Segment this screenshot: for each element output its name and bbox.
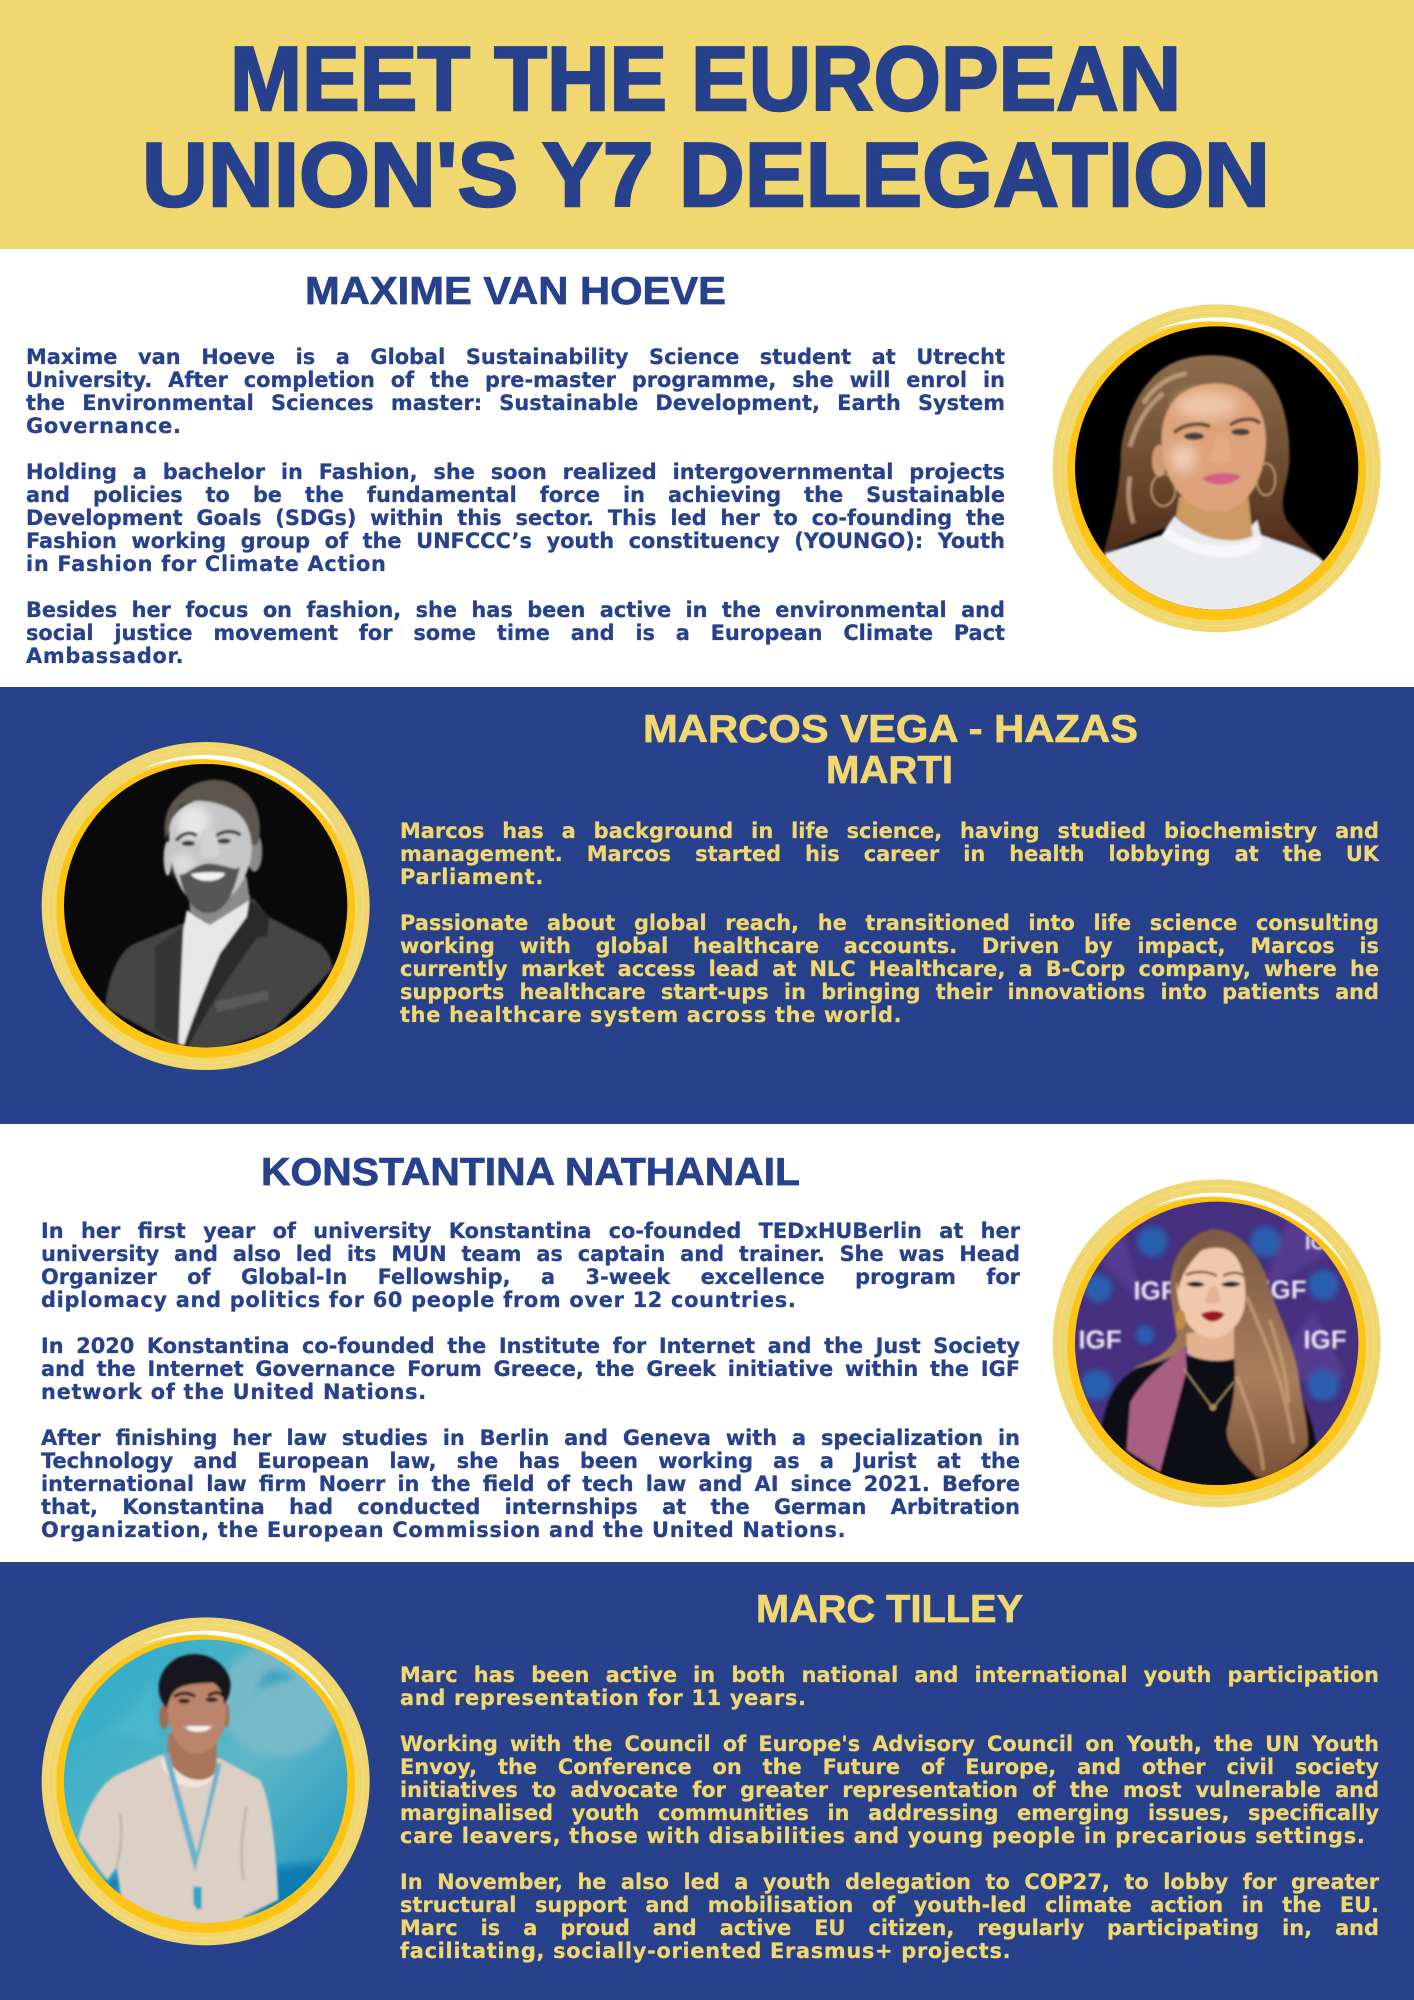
biography: Konstantina Nathanail: network of the United Nations. [41, 1380, 427, 1404]
biography: Marcos Vega-Hazas Marti: working with global healthcare accounts. Driven by impact, Marcos is [400, 934, 1379, 958]
biography: Konstantina Nathanail: After finishing her law studies in Berlin and Geneva with a specialization in [41, 1426, 1020, 1450]
title [142, 29, 1270, 226]
heading: Konstantina Nathanail: KONSTANTINA NATHANAIL [261, 1151, 800, 1194]
biography: Konstantina Nathanail: diplomacy and politics for 60 people from over 12 countries. [41, 1288, 796, 1312]
biography: Konstantina Nathanail: Organization, the European Commission and the United Nations. [41, 1518, 846, 1542]
biography: Marc Tilley: Marc is a proud and active EU citizen, regularly participating in, and [400, 1916, 1379, 1940]
biography: Konstantina Nathanail: Organizer of Global-In Fellowship, a 3-week excellence program for [41, 1265, 1020, 1289]
heading: Maxime van Hoeve: MAXIME VAN HOEVE [305, 270, 726, 313]
biography: Maxime van Hoeve: Holding a bachelor in Fashion, she soon realized intergovernmental projects [26, 460, 1005, 484]
biography: Marcos Vega-Hazas Marti: management. Marcos started his career in health lobbying at the UK [400, 842, 1379, 866]
heading: Marcos Vega-Hazas Marti: MARCOS VEGA - HAZAS [643, 708, 1138, 751]
biography: Konstantina Nathanail [40, 1219, 1020, 1542]
biography: Marcos Vega-Hazas Marti: the healthcare system across the world. [400, 1003, 902, 1027]
panel: Maxime van Hoeve [0, 249, 1414, 687]
portrait: Konstantina Nathanail: IGF [1078, 1324, 1122, 1354]
panel: Konstantina Nathanail [0, 1124, 1414, 1562]
title: MEET THE EUROPEAN [230, 29, 1181, 130]
biography: Konstantina Nathanail: and the Internet Governance Forum Greece, the Greek initiative within the IGF [41, 1357, 1020, 1381]
portrait: Maxime van Hoeve [1052, 304, 1381, 632]
biography: Marc Tilley: and representation for 11 years. [400, 1686, 807, 1710]
biography: Marc Tilley: marginalised youth communities in addressing emerging issues, specifically [400, 1801, 1379, 1825]
heading: Marcos Vega-Hazas Marti [643, 708, 1138, 792]
heading: Marcos Vega-Hazas Marti: MARTI [826, 749, 953, 792]
biography: Maxime van Hoeve: Besides her focus on fashion, she has been active in the environmental and [26, 598, 1005, 622]
portrait: Konstantina Nathanail: IGF [1305, 1232, 1338, 1254]
panel: title banner [0, 0, 1414, 249]
biography: Marcos Vega-Hazas Marti: Passionate about global reach, he transitioned into life science consulting [400, 911, 1379, 935]
biography: Maxime van Hoeve: the Environmental Sciences master: Sustainable Development, Earth System [26, 391, 1005, 415]
biography: Marcos Vega-Hazas Marti: currently market access lead at NLC Healthcare, a B-Corp company, where he [400, 957, 1379, 981]
biography: Maxime van Hoeve [26, 345, 1005, 668]
portrait: Konstantina Nathanail: IGF [1133, 1275, 1177, 1305]
biography: Marcos Vega-Hazas Marti [400, 819, 1380, 1027]
biography: Marc Tilley: initiatives to advocate for greater representation of the most vulnerable and [400, 1778, 1379, 1802]
biography: Maxime van Hoeve: University. After completion of the pre-master programme, she will enrol in [26, 368, 1005, 392]
biography: Konstantina Nathanail: In 2020 Konstantina co-founded the Institute for Internet and the Just Society [41, 1334, 1020, 1358]
biography: Maxime van Hoeve: Fashion working group of the UNFCCC’s youth constituency (YOUNGO): Youth [26, 529, 1005, 553]
biography: Marc Tilley: care leavers, those with disabilities and young people in precarious settings. [400, 1824, 1365, 1848]
portrait: Konstantina Nathanail: IGF [1303, 1324, 1347, 1354]
biography: Konstantina Nathanail: that, Konstantina had conducted internships at the German Arbitration [41, 1495, 1020, 1519]
biography: Marc Tilley: structural support and mobilisation of youth-led climate action in the EU. [400, 1893, 1379, 1917]
biography: Konstantina Nathanail: university and also led its MUN team as captain and trainer. She was Head [41, 1242, 1020, 1266]
biography: Marc Tilley: facilitating, socially-oriented Erasmus+ projects. [400, 1939, 1011, 1963]
panel: Marcos Vega-Hazas Marti [0, 687, 1414, 1124]
biography: Konstantina Nathanail: Technology and European law, she has been working as a Jurist at the [41, 1449, 1020, 1473]
biography: Maxime van Hoeve: in Fashion for Climate Action [26, 552, 387, 576]
portrait: Marc Tilley [42, 1617, 370, 1946]
biography: Marcos Vega-Hazas Marti: Parliament. [400, 865, 544, 889]
biography: Marc Tilley: Working with the Council of Europe's Advisory Council on Youth, the UN Youth [400, 1732, 1379, 1756]
biography: Konstantina Nathanail: international law firm Noerr in the field of tech law and AI since 2021. Before [41, 1472, 1020, 1496]
biography: Marc Tilley: Envoy, the Conference on the Future of Europe, and other civil society [400, 1755, 1379, 1779]
biography: Marc Tilley: Marc has been active in both national and international youth participation [400, 1663, 1379, 1687]
biography: Konstantina Nathanail: In her first year of university Konstantina co-founded TEDxHUBerlin at her [41, 1219, 1020, 1243]
portrait: Marcos Vega-Hazas Marti [42, 742, 370, 1070]
biography: Marcos Vega-Hazas Marti: supports healthcare start-ups in bringing their innovations into patients and [400, 980, 1379, 1004]
biography: Marcos Vega-Hazas Marti: Marcos has a background in life science, having studied biochemistry and [400, 819, 1379, 843]
panel: Marc Tilley [0, 1562, 1414, 2000]
biography: Maxime van Hoeve: Ambassador. [26, 644, 184, 668]
biography: Marc Tilley [400, 1663, 1380, 1963]
biography: Maxime van Hoeve: Development Goals (SDGs) within this sector. This led her to co-founding the [26, 506, 1005, 530]
title: UNION'S Y7 DELEGATION [142, 125, 1270, 226]
biography: Maxime van Hoeve: Governance. [26, 414, 182, 438]
heading: Marc Tilley: MARC TILLEY [756, 1588, 1023, 1631]
portrait: Konstantina Nathanail [1052, 1179, 1381, 1508]
portrait: Konstantina Nathanail: IGF [1263, 1274, 1307, 1304]
biography: Maxime van Hoeve: Maxime van Hoeve is a Global Sustainability Science student at Utrecht [26, 345, 1005, 369]
biography: Marc Tilley: In November, he also led a youth delegation to COP27, to lobby for greater [400, 1870, 1379, 1894]
biography: Maxime van Hoeve: and policies to be the fundamental force in achieving the Sustainable [26, 483, 1005, 507]
biography: Maxime van Hoeve: social justice movement for some time and is a European Climate Pact [26, 621, 1005, 645]
